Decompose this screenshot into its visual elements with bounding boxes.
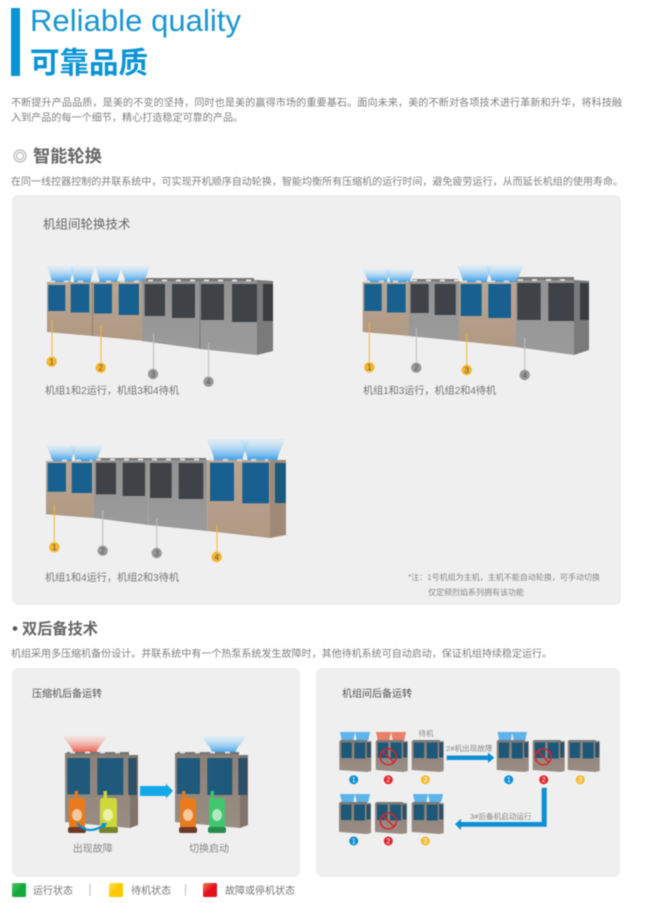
legend: standby: 待机状态 bbox=[131, 884, 171, 897]
compressor: orange bbox=[179, 791, 197, 833]
diagram: units 1 and 3 running: 3 bbox=[464, 366, 469, 375]
number badges: 2 bbox=[386, 777, 390, 784]
legend: running: 运行状态 bbox=[33, 884, 73, 897]
arrow: to fault state bbox=[447, 752, 494, 763]
diagram: units 1 and 3 running: 1 bbox=[367, 363, 372, 372]
diagram: units 1 and 2 running: 3 bbox=[151, 370, 156, 379]
number badges: 2 bbox=[386, 838, 390, 846]
icon: switch arrow bbox=[77, 823, 104, 830]
panel heading: 压缩机后备运转 bbox=[32, 687, 102, 700]
state after fault bbox=[497, 732, 600, 772]
state with standby running bbox=[339, 794, 444, 834]
arrow: to standby start bbox=[455, 788, 547, 830]
panel: rotation between units bbox=[12, 195, 621, 605]
diagram: units 1 and 2 running: 1 bbox=[49, 358, 54, 366]
number badges: 2 bbox=[542, 777, 546, 784]
rotation description: 在同一线控器控制的并联系统中，可实现开机顺序自动轮换，智能均衡所有压缩机的运行时间，避免疲劳运行，从而延长机组的使用寿命。 bbox=[11, 175, 623, 188]
title accent bar bbox=[11, 8, 20, 76]
panel: compressor backup bbox=[12, 668, 300, 877]
legend: fault: 故障或停机状态 bbox=[225, 884, 295, 897]
number badges: 3 bbox=[423, 838, 427, 846]
legend: standby bbox=[109, 883, 171, 897]
diagram: units 1 and 4 running: 3 bbox=[154, 549, 159, 558]
number badges: 1 bbox=[507, 777, 511, 784]
backup description: 机组采用多压缩机备份设计。并联系统中有一个热泵系统发生故障时，其他待机系统可自动启动，保证机组持续稳定运行。 bbox=[11, 647, 552, 660]
panel heading: 机组间后备运转 bbox=[342, 687, 412, 700]
number badges bbox=[349, 775, 585, 846]
legend: fault bbox=[203, 883, 295, 897]
number badges: 3 bbox=[578, 777, 582, 784]
number badges: 1 bbox=[352, 777, 356, 784]
diagram: units 1 and 2 running bbox=[45, 266, 273, 397]
intro text bbox=[11, 96, 622, 124]
compressor: yellow bbox=[99, 791, 118, 833]
intro text: 不断提升产品品质，是美的不变的坚持，同时也是美的赢得市场的重要基石。面向未来，美的不断对各项技术进行革新和升华，将科技融 bbox=[11, 96, 622, 109]
diagram: units 1 and 3 running bbox=[363, 265, 589, 397]
footnote: *注：1号机组为主机，主机不能自动轮换，可手动切换 bbox=[408, 572, 600, 582]
footnote bbox=[408, 572, 600, 597]
caption: fault: 出现故障 bbox=[73, 842, 113, 855]
heading: smart rotation: 智能轮换 bbox=[33, 146, 102, 166]
diagram: units 1 and 2 running: 4 bbox=[206, 378, 211, 386]
heading: dual backup: 双后备技术 bbox=[22, 620, 98, 638]
diagram: units 1 and 3 running: 机组1和3运行，机组2和4待机 bbox=[363, 384, 496, 397]
title: Chinese: 可靠品质 bbox=[30, 47, 148, 80]
panel heading: 机组间轮换技术 bbox=[43, 218, 131, 232]
compressor: green bbox=[208, 791, 226, 833]
arrow label: fault: 2#机出现故障 bbox=[446, 743, 493, 753]
arrow label: standby start: 3#后备机启动运行 bbox=[470, 811, 532, 821]
arrow: switch bbox=[140, 784, 173, 798]
state before fault: 待机 bbox=[418, 728, 434, 738]
state before fault bbox=[339, 728, 444, 772]
unit after switching bbox=[175, 736, 248, 833]
diagram: units 1 and 3 running: 4 bbox=[522, 371, 527, 380]
diagram: units 1 and 4 running bbox=[45, 439, 286, 584]
diagram: units 1 and 4 running: 1 bbox=[52, 543, 57, 552]
diagram: units 1 and 4 running: 2 bbox=[100, 546, 105, 556]
legend bbox=[12, 883, 295, 897]
number badges: 3 bbox=[423, 777, 427, 784]
legend: running bbox=[12, 883, 73, 897]
caption: switched: 切换启动 bbox=[189, 842, 229, 855]
compressor: orange bbox=[68, 791, 86, 833]
intro text: 入到产品的每一个细节，精心打造稳定可靠的产品。 bbox=[11, 111, 243, 124]
diagram: units 1 and 3 running: 2 bbox=[414, 364, 419, 372]
diagram: units 1 and 2 running: 2 bbox=[98, 364, 103, 372]
diagram: units 1 and 2 running: 机组1和2运行，机组3和4待机 bbox=[45, 384, 179, 397]
number badges: 1 bbox=[352, 838, 356, 846]
diagram: units 1 and 4 running: 机组1和4运行，机组2和3待机 bbox=[45, 571, 179, 584]
title: English: Reliable quality bbox=[30, 3, 242, 38]
unit with failed compressor bbox=[63, 736, 138, 833]
footnote: 仅定频烈焰系列拥有该功能 bbox=[428, 587, 524, 597]
panel: unit backup bbox=[316, 668, 620, 877]
diagram: units 1 and 4 running: 4 bbox=[214, 553, 219, 562]
